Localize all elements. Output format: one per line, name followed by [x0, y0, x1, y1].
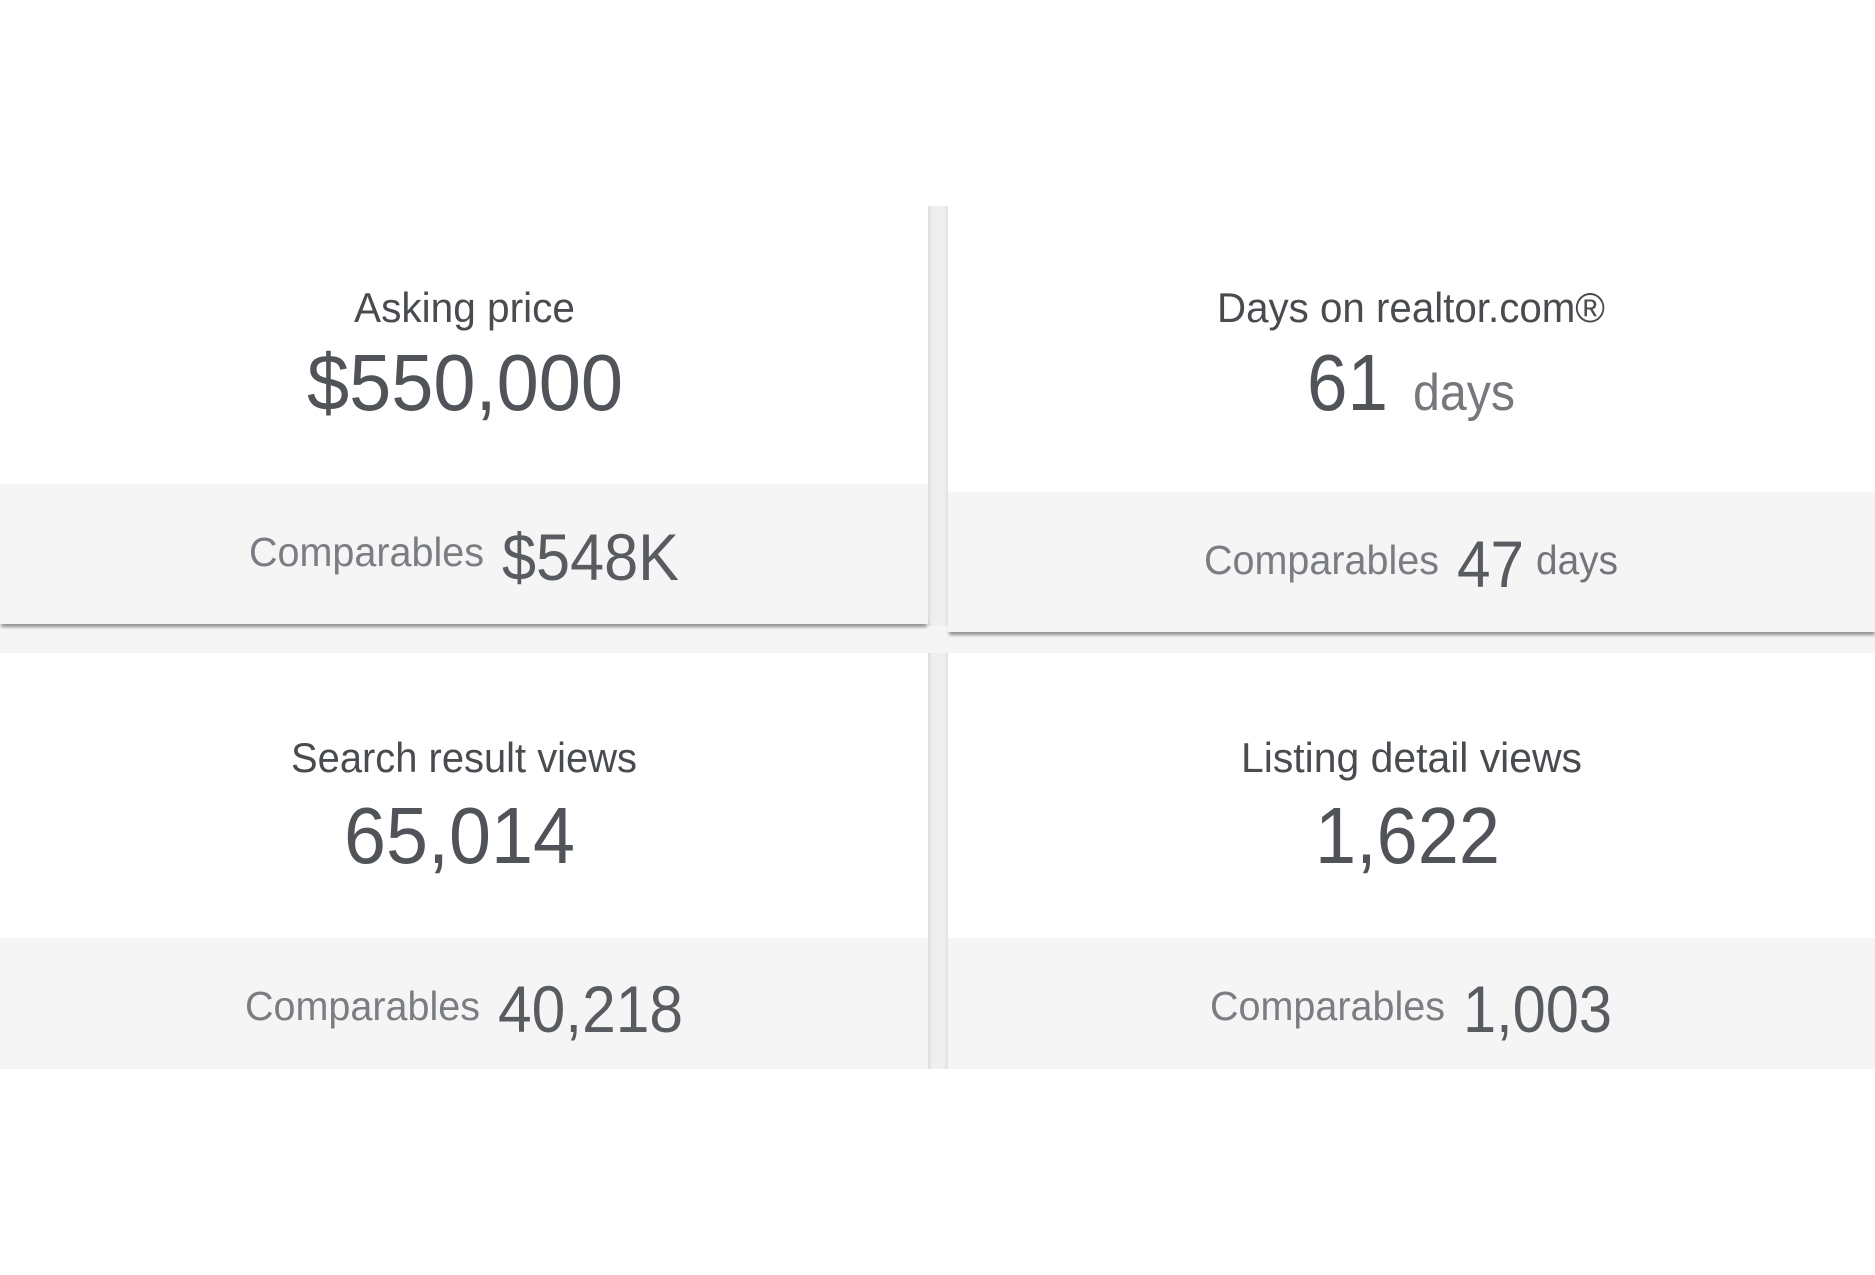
comparables unit: days [1536, 537, 1618, 583]
heading: search result views: Search result views [291, 734, 637, 781]
comparables label: Comparables [249, 529, 484, 575]
value: listing detail views: 1,622 [1315, 791, 1500, 880]
heading: listing detail views: Listing detail views [1241, 734, 1582, 781]
panel: listing detail views [948, 653, 1875, 1069]
value: search result views: 65,014 [344, 791, 575, 880]
comparables label: Comparables [1204, 537, 1439, 583]
comparables label: Comparables [1210, 983, 1445, 1029]
comparables band [0, 484, 928, 624]
heading: asking price: Asking price [354, 284, 575, 331]
comparables value: 1,003 [1463, 972, 1612, 1046]
comparables band [0, 938, 928, 1069]
comparables band [948, 492, 1875, 632]
unit: days: days [1413, 364, 1515, 422]
comparables label: Comparables [245, 983, 480, 1029]
panel: asking price [0, 206, 928, 627]
comparables value: 47 [1457, 527, 1524, 601]
value: 61: 61 [1307, 338, 1388, 427]
heading: days on realtor.com: Days on realtor.com® [1217, 284, 1605, 331]
comparables value: $548K [502, 520, 679, 594]
comparables value: 40,218 [498, 972, 683, 1046]
comparables band [948, 938, 1875, 1069]
value: asking price: $550,000 [307, 338, 623, 427]
panel: search result views [0, 653, 928, 1069]
panel: days on realtor.com [948, 206, 1875, 635]
